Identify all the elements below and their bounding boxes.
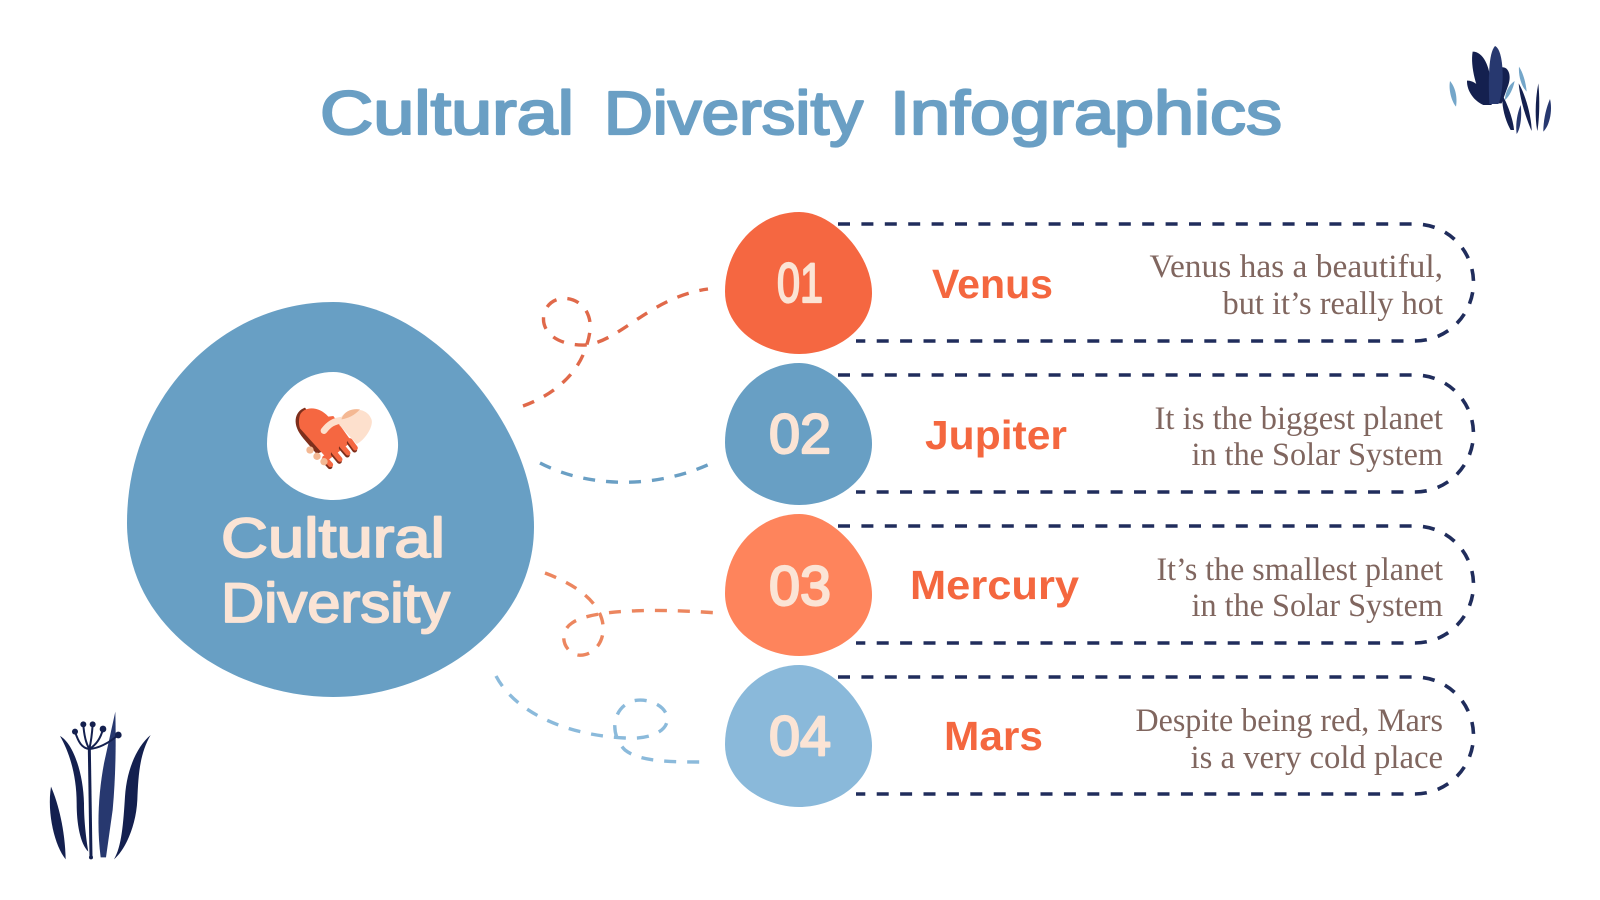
arrow: dashed connector 01 bbox=[523, 289, 708, 406]
arrow: dashed connector 03 bbox=[545, 573, 718, 655]
label: Cultural Diversity: Cultural bbox=[221, 506, 445, 569]
panel: row 01 Venus bbox=[725, 212, 1474, 354]
panel: row 03 Mercury bbox=[725, 514, 1474, 656]
panel: row 03 Mercury: in the Solar System bbox=[1192, 588, 1443, 624]
panel: row 01 Venus: 01 bbox=[777, 251, 823, 314]
panel: central blob bbox=[127, 302, 534, 697]
arrow: dashed connector 02 bbox=[540, 461, 716, 482]
label: Cultural Diversity bbox=[221, 506, 450, 634]
panel: row 03 Mercury: It’s the smallest planet bbox=[1156, 552, 1443, 588]
panel: row 04 Mars: is a very cold place bbox=[1190, 740, 1443, 776]
title bbox=[320, 79, 1282, 147]
panel: row 02 Jupiter bbox=[725, 363, 1473, 505]
panel: row 04 Mars: Mars bbox=[944, 713, 1043, 759]
title: Diversity bbox=[604, 79, 864, 147]
panel: row 04 Mars: 04 bbox=[769, 704, 831, 767]
panel: row 04 Mars bbox=[725, 665, 1474, 807]
icon: white blob with handshake heart bbox=[267, 372, 398, 500]
panel: row 02 Jupiter: 02 bbox=[769, 402, 831, 465]
arrow: dashed connector 04 bbox=[496, 676, 707, 762]
panel: row 03 Mercury: Mercury bbox=[910, 562, 1079, 608]
panel: row 01 Venus: Venus has a beautiful, bbox=[1150, 249, 1443, 285]
panel: row 02 Jupiter: It is the biggest planet bbox=[1154, 401, 1443, 437]
title: Infographics bbox=[890, 79, 1282, 147]
panel: row 03 Mercury: 03 bbox=[769, 554, 831, 617]
panel: row 02 Jupiter: Jupiter bbox=[925, 412, 1067, 458]
panel: row 04 Mars: Despite being red, Mars bbox=[1136, 703, 1443, 739]
label: Cultural Diversity: Diversity bbox=[221, 571, 450, 634]
icon: bottom-left plant bbox=[50, 712, 151, 859]
panel: row 01 Venus: Venus bbox=[932, 261, 1053, 307]
title: Cultural bbox=[320, 79, 574, 147]
panel: row 02 Jupiter: in the Solar System bbox=[1192, 437, 1443, 473]
icon: top-right plant bbox=[1450, 46, 1551, 134]
panel: row 01 Venus: but it’s really hot bbox=[1222, 286, 1443, 322]
